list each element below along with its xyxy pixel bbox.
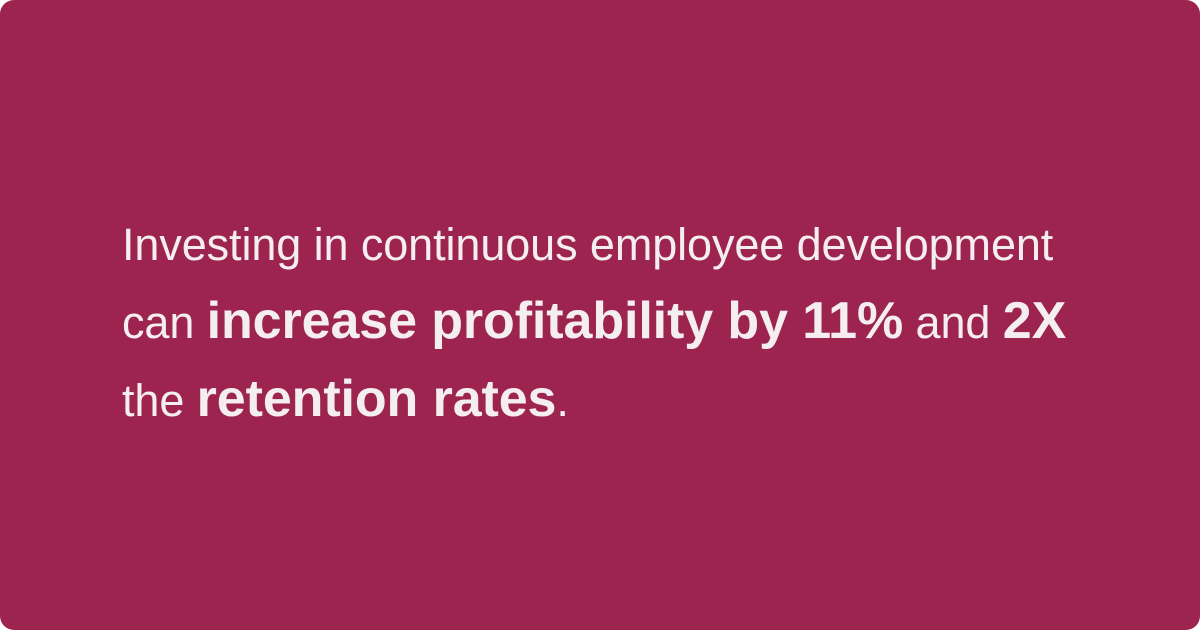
main statement text <box>122 219 1066 428</box>
main statement text: the retention rates. <box>122 370 569 428</box>
main statement text: can increase profitability by 11% and 2X <box>122 292 1066 350</box>
main statement text: Investing in continuous employee development <box>122 219 1053 270</box>
